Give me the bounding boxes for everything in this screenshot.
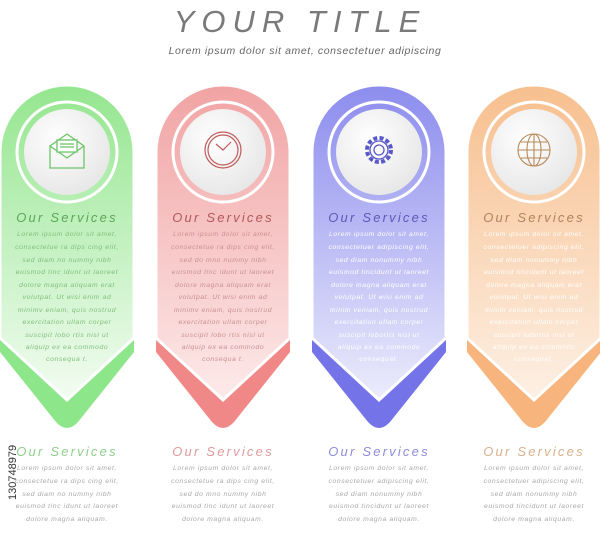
text block: card bodies: sed do mno nummy nibh: [179, 257, 267, 264]
bottom text blocks: Our Services: [483, 444, 585, 459]
text block: card bodies: [15, 231, 584, 363]
bottom text blocks: sed do mno nummy nibh: [179, 491, 267, 498]
text block: card bodies: exercitation ullam corper: [178, 319, 268, 326]
icon: clock: [205, 132, 241, 168]
bottom text blocks: [15, 444, 585, 523]
text block: card bodies: minim veniam, quis nostrud: [330, 307, 428, 314]
bottom text blocks: sed diam no nummy nibh: [22, 491, 112, 498]
text block: card bodies: consequa t.: [202, 356, 244, 363]
bottom text blocks: consectetue ra dips cing elit,: [15, 478, 119, 485]
text block: card bodies: consectetue ra dips cing elit,: [171, 244, 275, 251]
card texts: [16, 210, 585, 225]
text block: card bodies: sed diam no nummy nibh: [22, 257, 112, 264]
text block: card bodies: aliquip ex ea commodo: [493, 344, 575, 351]
card texts: Our Services: [483, 210, 585, 225]
icon: gear: [367, 138, 391, 162]
text block: card bodies: suscipit lobo rtis nisl ut: [25, 332, 109, 339]
bottom text blocks: Lorem ipsum dolor sit amet,: [484, 465, 584, 472]
text block: card bodies: aliquip ex ea commodo: [26, 344, 108, 351]
bottom text blocks: Our Services: [172, 444, 274, 459]
text block: card bodies: aliquip ex ea commodo: [338, 344, 420, 351]
text block: card bodies: sed diam nonummy nibh: [491, 257, 577, 264]
bottom text blocks: Our Services: [328, 444, 430, 459]
title: YOUR TITLE: [174, 4, 426, 39]
bottom text blocks: Lorem ipsum dolor sit amet,: [173, 465, 273, 472]
text block: card bodies: dolore magna aliquam erat: [175, 282, 271, 289]
card texts: Our Services: [328, 210, 430, 225]
bottom text blocks: Lorem ipsum dolor sit amet,: [329, 465, 429, 472]
text block: card bodies: suscipit lobortis nisl ut: [493, 332, 575, 339]
card texts: Our Services: [172, 210, 274, 225]
text block: card bodies: consectetuer adipiscing elit,: [329, 244, 429, 251]
bottom text blocks: sed diam nonummy nibh: [336, 491, 422, 498]
text block: card bodies: dolore magna aliquam erat: [19, 282, 115, 289]
icon: globe: [518, 134, 550, 166]
bottom text blocks: consectetue ra dips cing elit,: [171, 478, 275, 485]
text block: card bodies: suscipit lobortis nisl ut: [338, 332, 420, 339]
text block: card bodies: Lorem ipsum dolor sit amet,: [17, 231, 117, 238]
text block: card bodies: consequat.: [359, 356, 399, 363]
bottom text blocks: dolore magna aliquam.: [26, 516, 108, 523]
panel: blue card: [312, 85, 446, 428]
bottom text blocks: dolore magna aliquam.: [338, 516, 420, 523]
subtitle: Lorem ipsum dolor sit amet, consectetuer adipiscing: [169, 45, 441, 57]
icon: envelope: [50, 134, 84, 168]
bottom text blocks: consectetuer adipiscing elit,: [329, 478, 429, 485]
card texts: Our Services: [16, 210, 118, 225]
bottom text blocks: euismod tincidunt ut laoreet: [484, 503, 584, 510]
bottom text blocks: dolore magna aliquam.: [493, 516, 575, 523]
panel: orange card: [467, 85, 600, 428]
panel: green card: [0, 85, 134, 428]
text block: card bodies: Lorem ipsum dolor sit amet,: [484, 231, 584, 238]
text block: card bodies: consectetuer adipiscing elit,: [484, 244, 584, 251]
text block: card bodies: dolore magna aliquam erat: [486, 282, 582, 289]
bottom text blocks: Lorem ipsum dolor sit amet,: [17, 465, 117, 472]
text block: card bodies: volutpat. Ut wisi enim ad: [23, 294, 111, 301]
text block: card bodies: exercitation ullam corper: [22, 319, 112, 326]
bottom text blocks: Our Services: [16, 444, 118, 459]
text block: card bodies: aliquip ex ea commodo: [182, 344, 264, 351]
text block: card bodies: euismod tincidunt ut laoreet: [329, 269, 429, 276]
side id number: 130748979: [7, 445, 19, 500]
bottom text blocks: euismod tinc idunt ut laoreet: [172, 503, 275, 510]
text block: card bodies: volutpat. Ut wisi enim ad: [490, 294, 578, 301]
bottom text blocks: sed diam nonummy nibh: [491, 491, 577, 498]
text block: card bodies: sed diam nonummy nibh: [336, 257, 422, 264]
text block: card bodies: exercitation ullam corper: [489, 319, 579, 326]
text block: card bodies: minimv eniam, quis nostrud: [18, 307, 116, 314]
text block: card bodies: exercitation ullam corper: [334, 319, 424, 326]
text block: card bodies: volutpat. Ut wisi enim ad: [179, 294, 267, 301]
bottom text blocks: consectetuer adipiscing elit,: [484, 478, 584, 485]
text block: card bodies: euismod tinc idunt ut laoreet: [172, 269, 275, 276]
text block: card bodies: Lorem ipsum dolor sit amet,: [329, 231, 429, 238]
text block: card bodies: consequa t.: [46, 356, 88, 363]
text block: card bodies: volutpat. Ut wisi enim ad: [335, 294, 423, 301]
text block: card bodies: suscipit lobo rtis nisl ut: [181, 332, 265, 339]
bottom text blocks: euismod tinc idunt ut laoreet: [16, 503, 119, 510]
text block: card bodies: minim veniam, quis nostrud: [485, 307, 583, 314]
text block: card bodies: consectetue ra dips cing elit,: [15, 244, 119, 251]
bottom text blocks: euismod tincidunt ut laoreet: [329, 503, 429, 510]
panel: red card: [156, 85, 290, 428]
bottom text blocks: dolore magna aliquam.: [182, 516, 264, 523]
text block: card bodies: euismod tincidunt ut laoreet: [484, 269, 584, 276]
text block: card bodies: dolore magna aliquam erat: [331, 282, 427, 289]
text block: card bodies: consequat.: [514, 356, 554, 363]
text block: card bodies: minimv eniam, quis nostrud: [174, 307, 272, 314]
text block: card bodies: Lorem ipsum dolor sit amet,: [173, 231, 273, 238]
text block: card bodies: euismod tinc idunt ut laoreet: [16, 269, 119, 276]
